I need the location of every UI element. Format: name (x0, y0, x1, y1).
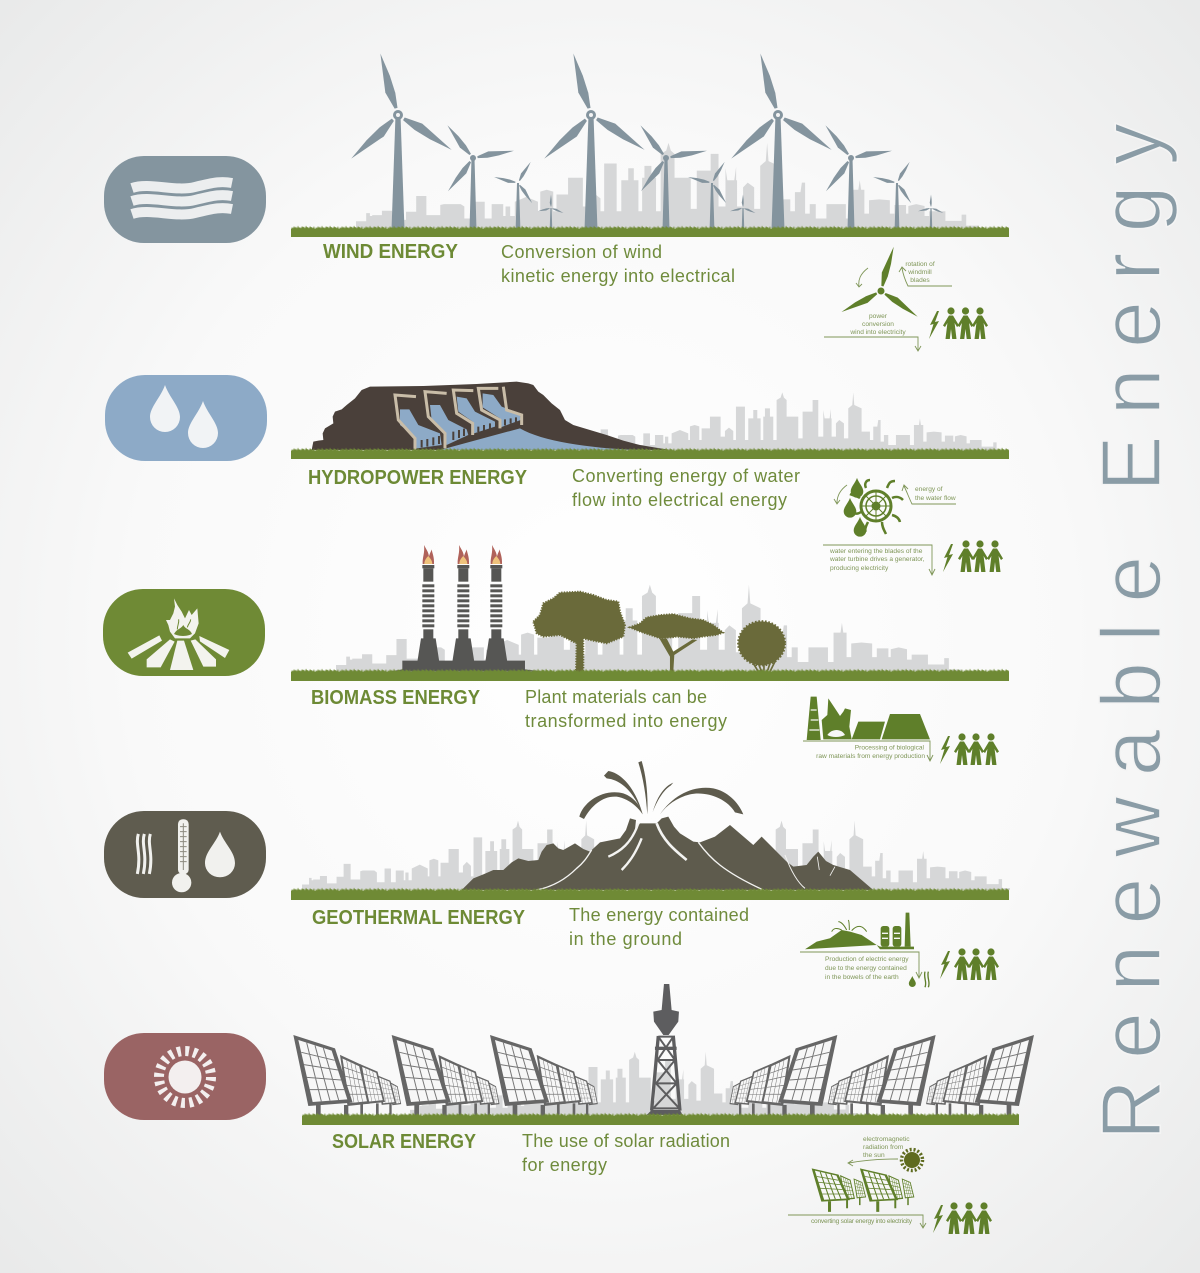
diagram: geothermal: Production of electric energy (825, 956, 909, 963)
description: solar (522, 1131, 730, 1175)
diagram: hydro: producing electricity (830, 565, 889, 572)
diagram: biomass: Processing of biological (855, 744, 925, 752)
diagram: hydro (823, 478, 1003, 575)
description: geothermal: The energy contained (569, 905, 749, 925)
description: biomass: transformed into energy (525, 711, 727, 731)
diagram: hydro: water entering the blades of the (829, 548, 923, 555)
icon: biomass pill (103, 589, 265, 676)
diagram: solar: converting solar energy into electricity (811, 1218, 913, 1225)
heading: biomass: BIOMASS ENERGY (311, 687, 481, 709)
diagram: wind: rotation of (905, 261, 935, 268)
diagram: geothermal: due to the energy contained (825, 965, 907, 972)
biomass skyline (336, 585, 961, 672)
icon: hydro pill (105, 375, 267, 461)
diagram: solar: the sun (863, 1152, 885, 1159)
description: solar: for energy (522, 1155, 607, 1175)
panel: geothermal (291, 761, 1011, 900)
diagram: hydro: energy of (915, 486, 943, 493)
dam illustration (312, 382, 670, 450)
diagram: wind: windmill (907, 269, 932, 276)
icon: solar pill (104, 1033, 266, 1120)
diagram: wind: blades (910, 277, 930, 284)
wind ground (291, 226, 1009, 237)
heading: wind energy: WIND ENERGY (323, 241, 459, 263)
diagram: wind (824, 246, 988, 351)
diagram: wind: wind into electricity (849, 329, 906, 336)
diagram: biomass: raw materials from energy production (816, 753, 925, 760)
biomass ground (291, 668, 1009, 681)
description: hydropower: Converting energy of water (572, 466, 800, 486)
wind turbines (349, 53, 944, 230)
description: wind energy: Conversion of wind (501, 242, 662, 262)
solar panels right (729, 1035, 1034, 1117)
hydro skyline (557, 392, 1006, 452)
icon: geothermal pill (104, 811, 266, 898)
description: solar: The use of solar radiation (522, 1131, 730, 1151)
volcano (462, 761, 873, 890)
description: biomass (525, 687, 727, 731)
description: geothermal (569, 905, 749, 949)
diagram: hydro: water turbine drives a generator, (829, 556, 925, 563)
panel: solar (293, 984, 1034, 1125)
tower (647, 984, 683, 1115)
diagram: wind: power (869, 313, 888, 320)
vertical title: Renewable Energy (1084, 123, 1178, 1140)
description: wind energy (501, 242, 735, 286)
description: wind energy: kinetic energy into electrical (501, 266, 735, 286)
diagram: geothermal: in the bowels of the earth (825, 974, 899, 981)
description: hydropower: flow into electrical energy (572, 490, 787, 510)
geothermal skyline (302, 821, 594, 890)
panel: biomass (291, 545, 1009, 681)
heading: geothermal: GEOTHERMAL ENERGY (312, 907, 526, 929)
diagram: solar: electromagnetic (863, 1136, 910, 1143)
heading: hydropower: HYDROPOWER ENERGY (308, 467, 528, 489)
hydro ground (291, 448, 1009, 459)
power plant chimneys (389, 545, 543, 672)
solar panels left (293, 1035, 598, 1117)
diagram: biomass (803, 697, 999, 765)
diagram: solar (788, 1136, 992, 1234)
solar skyline (410, 1052, 858, 1115)
panel: hydropower (291, 382, 1009, 459)
diagram: wind: conversion (862, 321, 894, 328)
description: hydropower (572, 466, 800, 510)
diagram: hydro: the water flow (915, 495, 956, 502)
panel: wind energy (291, 53, 1009, 237)
geothermal ground (291, 888, 1009, 900)
description: geothermal: in the ground (569, 929, 682, 949)
wind skyline (356, 143, 979, 228)
diagram: solar: radiation from (863, 1144, 904, 1151)
solar ground (302, 1112, 1019, 1125)
diagram: geothermal (800, 913, 999, 987)
trees (533, 592, 785, 672)
description: biomass: Plant materials can be (525, 687, 707, 707)
icon: wind pill (104, 156, 266, 243)
heading: solar: SOLAR ENERGY (332, 1131, 477, 1153)
